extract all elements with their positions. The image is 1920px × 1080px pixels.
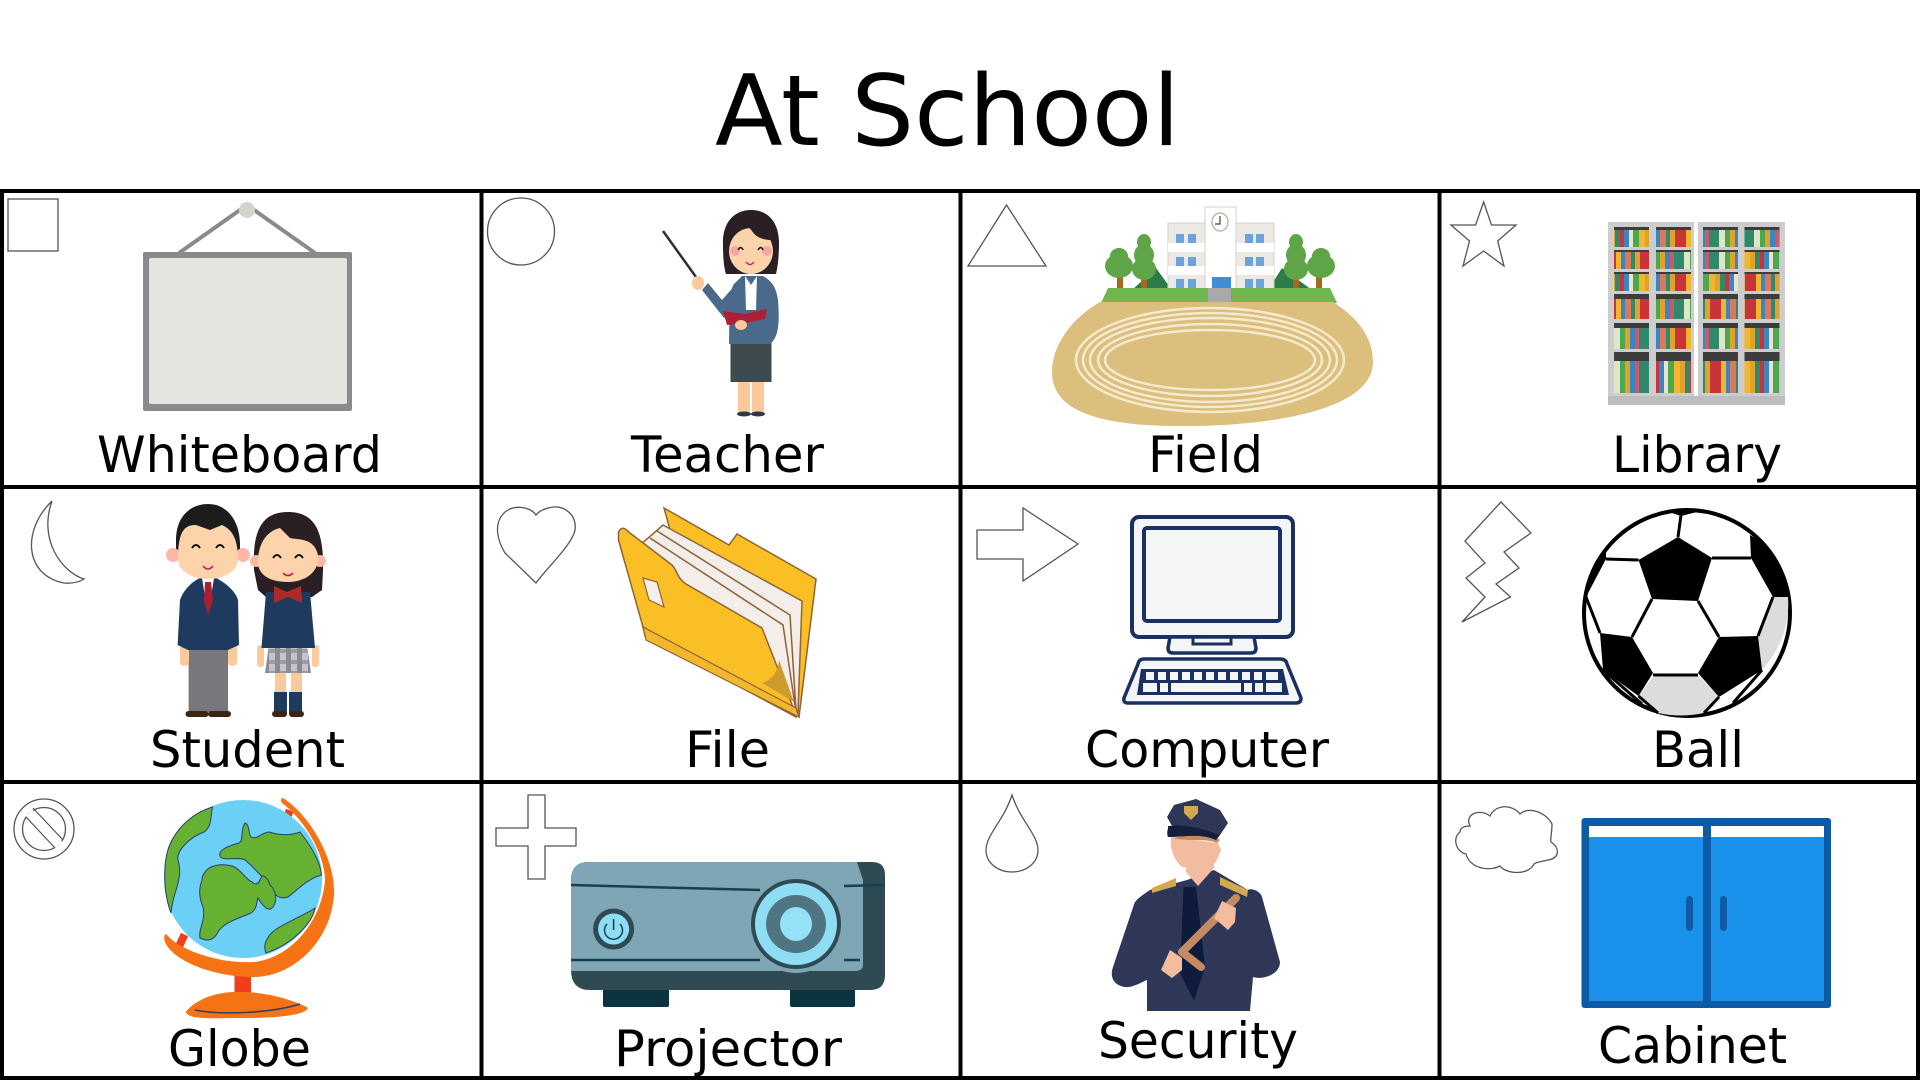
panel: cabinet — [1441, 784, 1918, 1076]
icon: globe — [164, 798, 334, 1018]
label: Whiteboard — [97, 426, 382, 484]
panel: ball — [1441, 489, 1918, 781]
icon: library shelves — [1608, 222, 1785, 405]
icon: whiteboard — [143, 202, 352, 411]
icon: security guard — [1112, 799, 1280, 1011]
label: File — [685, 721, 770, 779]
shape: no symbol — [14, 799, 74, 859]
label: Computer — [1085, 721, 1329, 779]
icon: computer — [1124, 517, 1301, 703]
icon: projector — [571, 862, 885, 1007]
shape: triangle — [968, 205, 1046, 266]
shape: heart — [497, 507, 575, 583]
shape: plus — [496, 795, 576, 879]
panel: library — [1441, 191, 1918, 487]
label: Projector — [614, 1020, 842, 1078]
icon: school field — [1052, 207, 1373, 426]
shape: lightning — [1462, 502, 1531, 622]
label: Library — [1612, 426, 1782, 484]
panel: projector — [482, 784, 959, 1078]
label: Teacher — [630, 426, 824, 484]
label: Globe — [168, 1020, 311, 1078]
label: Field — [1148, 426, 1263, 484]
shape: star — [1451, 202, 1516, 266]
panel: student — [2, 489, 480, 781]
label: Student — [150, 721, 345, 779]
panel: file — [482, 489, 959, 781]
panel: computer — [961, 489, 1438, 781]
shape: circle — [488, 198, 554, 265]
icon: cabinet — [1582, 818, 1831, 1008]
panel: globe — [2, 784, 480, 1078]
panel: whiteboard — [2, 191, 480, 487]
shape: cloud — [1456, 807, 1557, 872]
label: Security — [1098, 1012, 1298, 1070]
panel: security — [961, 784, 1438, 1076]
icon: students — [166, 504, 326, 717]
icon: teacher — [663, 210, 779, 416]
icon: soccer ball — [1584, 510, 1790, 716]
shape: arrow — [977, 508, 1078, 581]
title: At School — [715, 55, 1180, 169]
shape: moon — [31, 501, 84, 583]
label: Ball — [1652, 721, 1744, 779]
shape: drop — [986, 795, 1038, 872]
panel: teacher — [482, 191, 959, 487]
shape: square — [8, 199, 58, 251]
panel: field — [961, 191, 1438, 487]
label: Cabinet — [1598, 1017, 1787, 1075]
icon: folder — [618, 508, 816, 717]
